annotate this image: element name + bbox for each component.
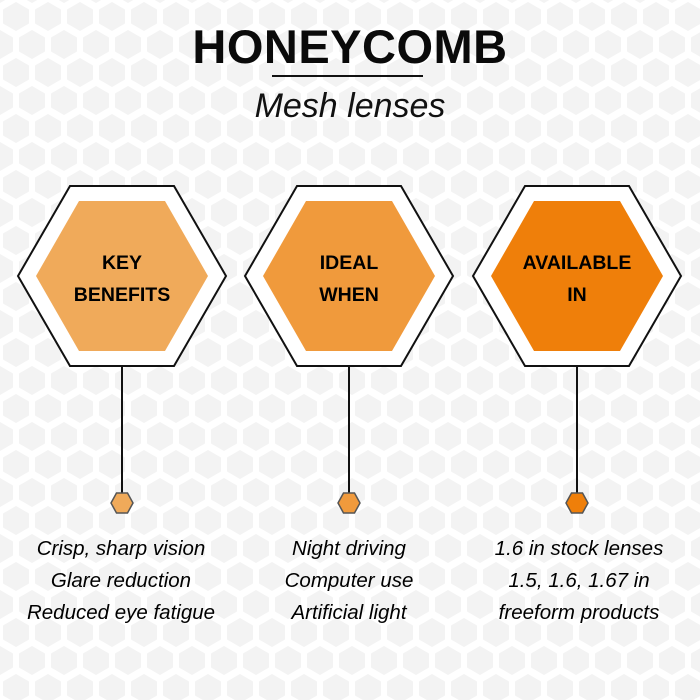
- panel: ideal when: Artificial light: [289, 601, 408, 624]
- panel: ideal when: [245, 186, 453, 624]
- panel: available in: 1.5, 1.6, 1.67 in: [508, 569, 650, 592]
- panel: ideal when: IDEAL: [320, 252, 378, 274]
- panel: ideal when: Night driving: [292, 537, 407, 560]
- title: HONEYCOMB: [192, 20, 508, 73]
- panel: available in: IN: [567, 284, 587, 306]
- panel: key benefits: Glare reduction: [51, 569, 191, 592]
- panel: key benefits: Crisp, sharp vision: [37, 537, 205, 560]
- panel: key benefits: KEY: [102, 252, 142, 274]
- panel: key benefits: Reduced eye fatigue: [27, 601, 215, 624]
- title: Mesh lenses: [255, 87, 445, 125]
- title: [192, 20, 508, 125]
- panel: available in: AVAILABLE: [523, 252, 631, 274]
- panel: available in: [473, 186, 681, 624]
- panel: available in: 1.6 in stock lenses: [495, 537, 663, 560]
- panel: ideal when: Computer use: [285, 569, 413, 592]
- panel: key benefits: [18, 186, 226, 624]
- panel: key benefits: BENEFITS: [74, 284, 170, 306]
- panel: available in: freeform products: [499, 601, 659, 624]
- panel: ideal when: WHEN: [319, 284, 379, 306]
